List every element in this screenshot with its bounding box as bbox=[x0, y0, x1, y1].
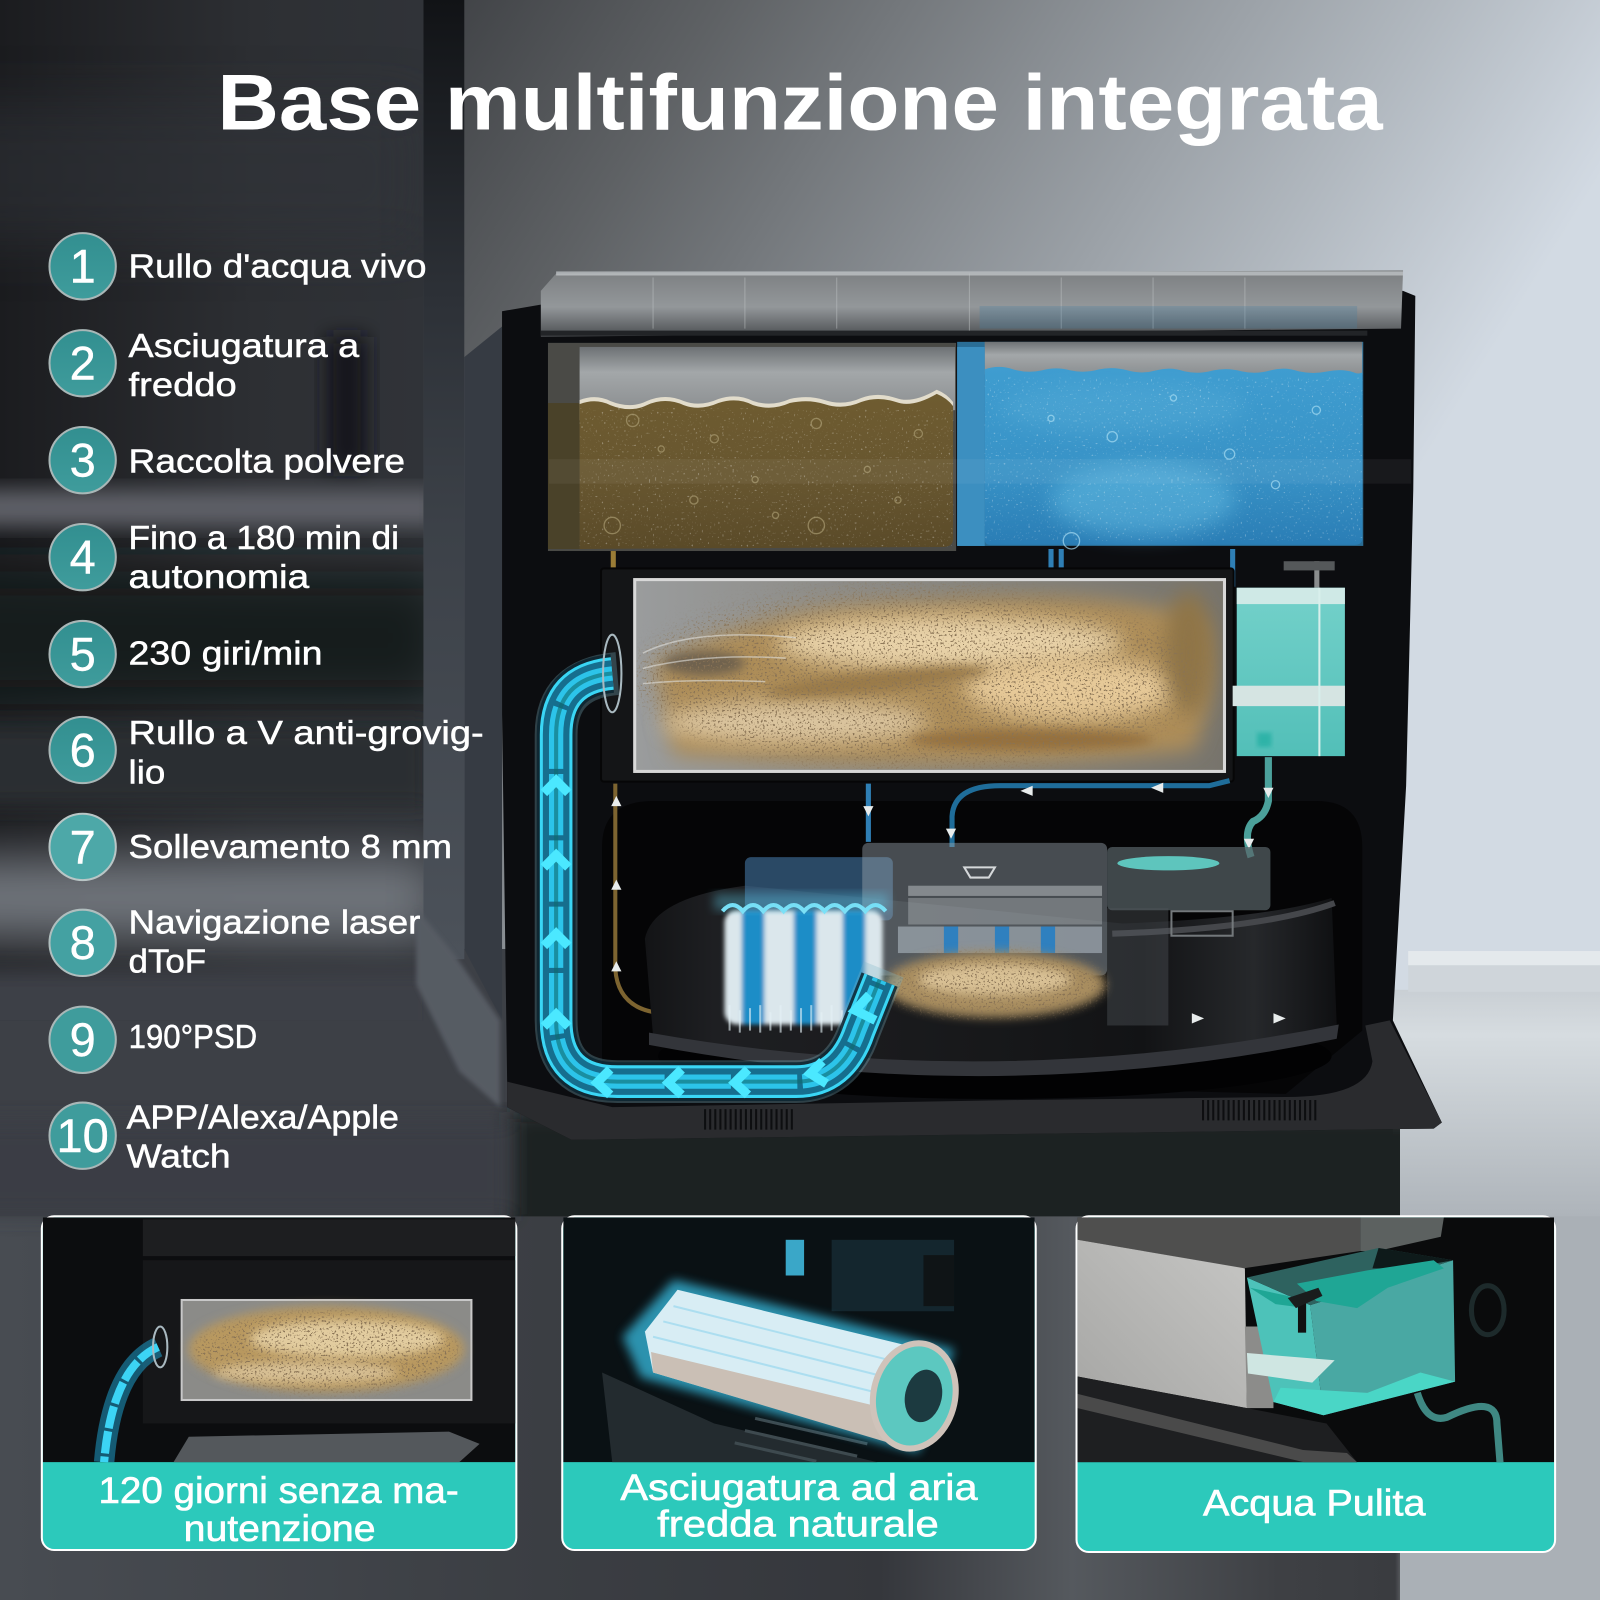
feature 8: Navigazione laser bbox=[129, 905, 420, 942]
feature 6: lio bbox=[129, 755, 165, 792]
glowing suction hose bbox=[556, 635, 884, 1082]
feature 10: 10 bbox=[57, 1110, 109, 1162]
exhaust arrows bbox=[1192, 1013, 1286, 1023]
station body bbox=[502, 291, 1442, 1140]
feature 6: 6 bbox=[70, 724, 96, 776]
card 2 photo bbox=[563, 1217, 1035, 1462]
cleaning roller bbox=[714, 894, 888, 1033]
title: Base multifunzione integrata bbox=[217, 59, 1384, 147]
feature 10 bbox=[49, 1100, 399, 1175]
card: 120 giorni: nutenzione bbox=[184, 1508, 376, 1549]
feature 3: Raccolta polvere bbox=[129, 443, 405, 480]
feature 7: Sollevamento 8 mm bbox=[129, 829, 452, 866]
feature 8: 8 bbox=[70, 917, 96, 969]
feature 4: autonomia bbox=[129, 559, 309, 596]
card 3 caption: Acqua Pulita bbox=[1203, 1482, 1426, 1523]
transparent lid bbox=[541, 270, 1403, 337]
feature 8 bbox=[49, 905, 420, 980]
feature 8: dToF bbox=[129, 943, 206, 980]
floor tray bbox=[507, 1020, 1442, 1140]
lower cavity bbox=[602, 801, 1362, 1094]
tray vents bbox=[704, 1110, 1316, 1119]
feature 7: 7 bbox=[70, 821, 96, 873]
feature 9 bbox=[49, 1007, 257, 1073]
feature 10: Watch bbox=[127, 1138, 231, 1175]
robot module housing bbox=[745, 843, 1270, 1026]
dust in robot bin bbox=[878, 944, 1112, 1020]
card 1 photo bbox=[43, 1217, 515, 1462]
clean water tank bbox=[549, 342, 1411, 549]
feature 2: freddo bbox=[129, 367, 237, 404]
feature 6 bbox=[49, 715, 484, 792]
feature 4 bbox=[49, 520, 399, 596]
flow arrows bbox=[611, 783, 1273, 1018]
feature 1 bbox=[49, 233, 427, 299]
feature 3: 3 bbox=[70, 435, 96, 487]
feature 2: Asciugatura a bbox=[129, 328, 359, 365]
feature 10: APP/Alexa/Apple bbox=[127, 1100, 399, 1137]
feature 2: 2 bbox=[70, 338, 96, 390]
card: 120 giorni bbox=[42, 1216, 516, 1550]
feature 5 bbox=[49, 621, 322, 687]
feature 7 bbox=[49, 814, 452, 880]
robot vacuum bbox=[645, 843, 1339, 1099]
feature 1: Rullo d'acqua vivo bbox=[129, 249, 427, 286]
dirty water tank bbox=[548, 343, 956, 551]
card: asciugatura: fredda naturale bbox=[657, 1504, 939, 1545]
card: acqua pulita bbox=[1077, 1216, 1555, 1552]
robot shell bbox=[645, 886, 1337, 1064]
feature 2 bbox=[49, 328, 359, 404]
feature list bbox=[49, 233, 484, 1175]
feature 4: Fino a 180 min di bbox=[129, 520, 399, 557]
feature 3 bbox=[49, 427, 405, 493]
dust collection box bbox=[601, 568, 1234, 782]
feature 9: 190°PSD bbox=[129, 1019, 257, 1056]
clean water filter tank bbox=[1233, 561, 1345, 756]
card 1 caption: 120 giorni senza ma- bbox=[98, 1470, 459, 1511]
teal tank bbox=[1247, 1248, 1455, 1415]
shell lip bbox=[649, 1024, 1339, 1076]
connecting pipes bbox=[613, 549, 1233, 587]
feature 9: 9 bbox=[70, 1014, 96, 1066]
hose chevron arrows bbox=[544, 781, 876, 1095]
card 3 photo bbox=[1078, 1217, 1554, 1462]
feature 1: 1 bbox=[70, 241, 96, 293]
robot shadow bbox=[658, 1013, 1332, 1099]
product: cutaway base station bbox=[502, 270, 1442, 1140]
feature 5: 230 giri/min bbox=[129, 635, 322, 672]
card 2 caption: Asciugatura ad aria bbox=[620, 1467, 978, 1508]
card: asciugatura bbox=[562, 1216, 1036, 1550]
feature 4: 4 bbox=[70, 531, 96, 583]
water pipes bbox=[615, 757, 1268, 1013]
feature 5: 5 bbox=[70, 628, 96, 680]
feature 6: Rullo a V anti-grovig- bbox=[129, 715, 484, 752]
